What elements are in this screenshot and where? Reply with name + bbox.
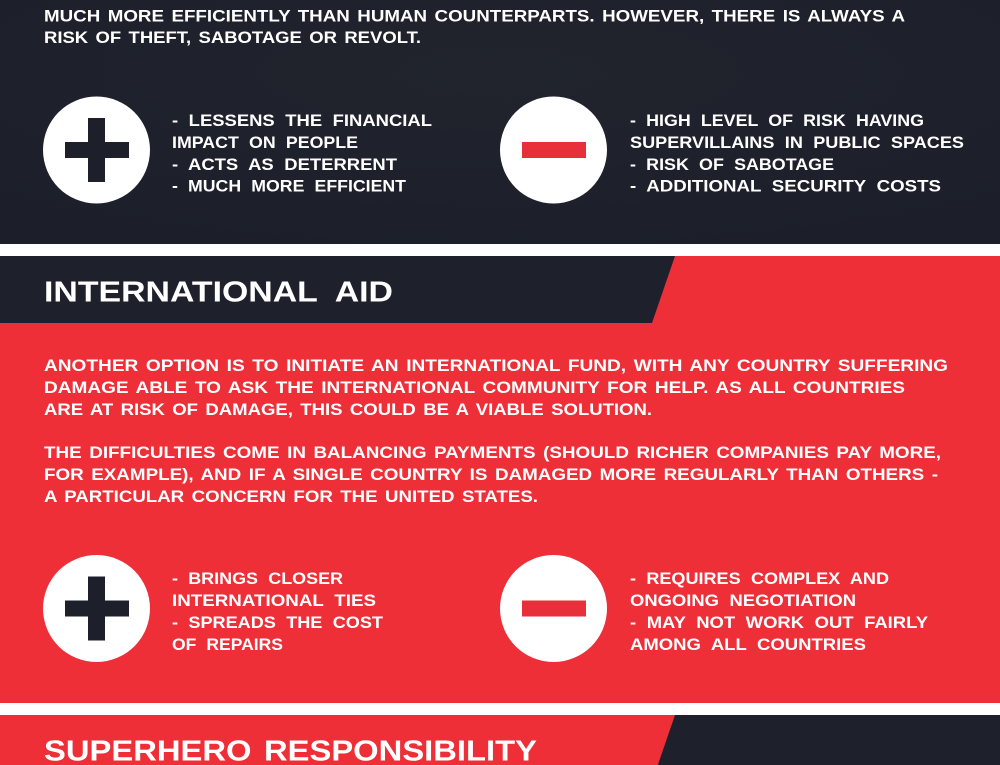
list: pros: - MUCH MORE EFFICIENT [172,176,407,196]
heading band: superhero responsibility [0,715,675,765]
text block: intro conclusion: MUCH MORE EFFICIENTLY THAN HUMAN COUNTERPARTS. HOWEVER, THERE IS ALWAYS A [44,8,905,26]
heading band: international aid: INTERNATIONAL AID [44,276,393,308]
list: pros: - BRINGS CLOSER [172,569,343,588]
panel: superhero responsibility section [0,715,1000,765]
text block: intro conclusion [44,8,905,47]
text block: fund explanation: DAMAGE ABLE TO ASK THE INTERNATIONAL COMMUNITY FOR HELP. AS ALL COUNTRIES [44,379,905,397]
list: cons: - RISK OF SABOTAGE [630,155,834,174]
list: cons [630,111,964,196]
heading band: international aid [0,256,675,323]
list: cons: AMONG ALL COUNTRIES [630,635,866,654]
icon: minus [500,96,607,204]
list: cons: SUPERVILLAINS IN PUBLIC SPACES [630,133,964,152]
text block: fund explanation: ANOTHER OPTION IS TO INITIATE AN INTERNATIONAL FUND, WITH ANY COUNTRY SUFFERING [44,357,948,375]
list: pros: OF REPAIRS [172,635,283,654]
list: cons: ONGOING NEGOTIATION [630,591,856,610]
list: cons: - HIGH LEVEL OF RISK HAVING [630,111,924,130]
icon: minus [500,555,607,662]
list: pros: - LESSENS THE FINANCIAL [172,111,432,130]
text block: difficulties: A PARTICULAR CONCERN FOR THE UNITED STATES. [44,488,538,506]
list: cons: - ADDITIONAL SECURITY COSTS [630,176,941,196]
icon: plus [43,555,150,662]
list: pros: - SPREADS THE COST [172,613,384,632]
list: pros [172,569,384,654]
text block: fund explanation: ARE AT RISK OF DAMAGE, THIS COULD BE A VIABLE SOLUTION. [44,401,652,419]
text block: difficulties [44,444,941,506]
list: pros: INTERNATIONAL TIES [172,591,376,610]
text block: fund explanation [44,357,948,419]
text block: difficulties: THE DIFFICULTIES COME IN BALANCING PAYMENTS (SHOULD RICHER COMPANIES PAY MORE, [44,444,941,462]
list: pros: IMPACT ON PEOPLE [172,133,358,152]
icon: plus [43,96,150,204]
list: cons: - REQUIRES COMPLEX AND [630,569,889,588]
list: cons [630,569,929,654]
list: cons: - MAY NOT WORK OUT FAIRLY [630,613,929,632]
panel: international aid section [0,256,1000,703]
list: pros [172,111,432,196]
text block: intro conclusion: RISK OF THEFT, SABOTAGE OR REVOLT. [44,29,421,47]
text block: difficulties: FOR EXAMPLE), AND IF A SINGLE COUNTRY IS DAMAGED MORE REGULARLY THAN OTHERS - [44,466,938,484]
panel: top dark section [0,0,1000,244]
list: pros: - ACTS AS DETERRENT [172,155,398,174]
